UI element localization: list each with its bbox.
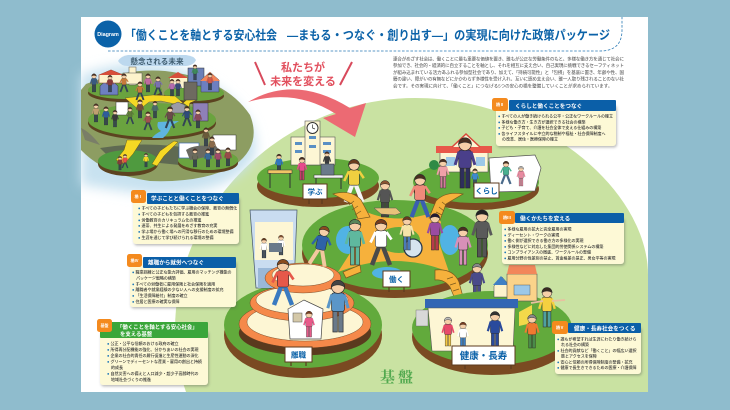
list II: ● すべての人が働き続けられる公平・公正なワークルールの確立 (498, 112, 613, 118)
houses (493, 265, 537, 301)
badge I: 橋Ⅰ (134, 193, 142, 199)
list IV: ● 離職者や就業経験の少ない人への支援制度の拡充 (132, 286, 224, 292)
panel: bridge IV from leaving work to employment (127, 254, 236, 307)
list foundation: ● 所得再分配機能の強化、分かちあいの社会の実現 (107, 346, 199, 352)
intro paragraph: 参加でき、社会的・経済的に自立することを軸とし、それを相互に支え合い、自己実現に挑戦できるセーフティネット (393, 62, 624, 69)
Diagram badge: Diagram (97, 32, 119, 38)
panel: foundation: 「働くことを軸とする安心社会」 (117, 323, 198, 331)
list III: ● 多様性などに対応した集団的労使関係システムの構築 (504, 243, 603, 249)
list foundation: 地域社会づくりの推進 (111, 376, 151, 382)
list I: ● 連帯、共生による発展をめざす教育の充実 (138, 222, 217, 228)
list IV: ● 住居と医療の確実な保障 (132, 298, 180, 304)
list V: 肢とアクセスを保障 (561, 353, 597, 359)
intro paragraph: 連合がめざす社会は、働くことに最も重要な価値を置き、誰もが公正な労働条件のもと、多様な働き方を通じて社会に (393, 56, 624, 62)
panel: bridge I learning and working: 学ぶことと働くことをつなぐ (151, 194, 224, 202)
panel: bridge V health and longevity: 健康・長寿社会をつくる (574, 324, 635, 332)
list III: ● 働く側が選択できる働き方の多様化の実現 (504, 237, 583, 243)
intro paragraph (393, 56, 624, 89)
panel: bridge III changing ways of working: 働くかたちを変える (520, 214, 570, 222)
list V: れる社会の構築 (561, 341, 589, 347)
list V: ● 社会的貢献など「働くこと」の幅広い選択 (557, 347, 637, 353)
list IV: ● すべての労働者に雇用保険と社会保険を適用 (132, 280, 215, 286)
stream (152, 121, 179, 138)
list foundation: ● 企業の社会的責任の履行促進と生産性運動の深化 (107, 352, 199, 358)
cloud label: feared future: 懸念される未来 (130, 56, 184, 66)
list foundation: ● グリーンでディーセントな産業・雇用の創出と持続 (107, 358, 202, 364)
list I: ● すべての子どもを包摂する教育の推進 (138, 210, 209, 216)
panel: bridge III changing ways of working (499, 211, 624, 264)
sign: learn: 学ぶ (308, 186, 323, 196)
students and desks (268, 152, 364, 202)
care building (489, 155, 541, 192)
list V: ● 安心と信頼の所得保障制度の整備・拡充 (557, 358, 633, 364)
orange star path (338, 210, 449, 272)
island: health and longevity (412, 265, 572, 375)
badge IV: 橋Ⅳ (130, 257, 138, 263)
island: living (413, 134, 541, 210)
panel: bridge V health and longevity (552, 321, 641, 374)
intro paragraph: 会です。その実現に向けて、「働くこと」につなげる5つの安心の橋を整備していくことが求められています。 (393, 82, 612, 89)
island: learning (257, 121, 379, 207)
label: foundation: 基盤 (380, 366, 416, 387)
panel: feared future illustration (81, 55, 256, 195)
list II: ● 子ども・子育て、介護を社会全体で支える仕組みの構築 (498, 124, 601, 130)
list I: ● 生涯を通じて学び続けられる環境の整備 (138, 234, 214, 240)
list IV: パッケージ戦略の構築 (136, 274, 176, 280)
sign: leaving work (285, 347, 312, 366)
crowd of worried people (90, 65, 232, 170)
house (436, 134, 492, 172)
white sheet (81, 17, 648, 392)
list I: ● すべての子どもたちに学ぶ機会の保障、教育の無償化 (138, 204, 237, 210)
island: leaving work (224, 210, 382, 378)
heading: we change the future (255, 60, 352, 88)
title text: ―まもる・つなぐ・創り出す―」の実現に向けた政策パッケージ (287, 28, 610, 42)
badge III: 橋Ⅲ (503, 214, 511, 220)
list foundation: ● 自然災害への備えと人口減少・超少子高齢時代の (107, 370, 199, 376)
panel: foundation: を支える基盤 (120, 330, 153, 338)
list III (504, 226, 616, 260)
list I: ● 学ぶ場から働く場への円滑な移行のための環境整備 (138, 228, 234, 234)
sign: leaving work: 離職 (291, 350, 306, 360)
list II: ● 多様な働き方・生き方が選択できる社会の構築 (498, 118, 585, 124)
list I (138, 204, 237, 240)
Diagram badge (94, 20, 122, 48)
family people (429, 138, 479, 188)
list II (498, 112, 613, 142)
list III: ● 雇用分野の性差別の禁止、賃金格差の是正、男女平等の実現 (504, 254, 616, 260)
future islands (88, 84, 162, 102)
panel: bridge II living and working: くらしと働くことをつなぐ (515, 102, 582, 110)
badge II: 橋Ⅱ (496, 101, 504, 107)
list III: ● コンプライアンスの徹底、ワークルールの整備 (504, 249, 591, 255)
panel: foundation (97, 319, 208, 385)
cloud label: feared future (118, 55, 196, 66)
badge V: 橋Ⅴ (556, 324, 564, 330)
office tower (250, 210, 297, 288)
list IV: ● 「生活保障給付」制度の確立 (132, 292, 188, 298)
intro paragraph: 籍の違い、障がいの有無などにかかわらず多様性を受け入れ、互いに認め支え合い、誰一人取り残されることのない社 (393, 76, 624, 83)
island: working (302, 174, 491, 300)
list I: ● 労働教育のカリキュラム化の推進 (138, 216, 201, 222)
school building (291, 121, 335, 165)
heading: we change the future: 私たちが (281, 60, 325, 74)
sign: work (383, 271, 410, 292)
list III: ● 多様な雇用の拡大と完全雇用の実現 (504, 226, 572, 232)
bridge steps (349, 201, 459, 291)
older couple (519, 287, 565, 348)
sign: work: 働く (389, 274, 404, 284)
panel: bridge I learning and working (131, 190, 239, 244)
arrow: we change the future (248, 89, 366, 137)
list V (557, 336, 637, 370)
lakes (336, 226, 360, 254)
heading: we change the future: 未来を変える (270, 74, 336, 88)
list V: ● 誰もが希望すれば生涯にわたり働き続けら (557, 336, 637, 342)
intro paragraph: が組み込まれている活力あふれる参加型社会であり、加えて、「持続可能性」と「包摂」を基底に置き、年齢や性、国 (393, 69, 624, 76)
list foundation: ● 公正・公平な信頼のおける政府の確立 (107, 340, 179, 346)
wheelchair user (400, 217, 422, 257)
walking people (346, 174, 491, 300)
list III: ● ディーセント・ワークの実現 (504, 231, 559, 237)
large light green ground (175, 98, 648, 392)
hall with cheerful people (416, 299, 518, 351)
sign: living: くらし (475, 186, 498, 196)
list foundation (107, 340, 202, 382)
panel: bridge II living and working (492, 98, 616, 146)
sign: health: 健康・長寿 (460, 350, 508, 362)
curved bridges (333, 192, 463, 299)
buildings (100, 78, 118, 95)
people on tiers (272, 224, 348, 332)
list foundation: 的成長 (111, 364, 123, 370)
panel: bridge IV from leaving work to employment: 離職から就労へつなぐ (148, 258, 204, 266)
title header (94, 17, 622, 51)
house with person (288, 300, 323, 339)
list IV: ● 職業訓練と公正な能力評価、雇用のマッチング機能の (132, 268, 232, 274)
stepped tiers (239, 263, 371, 355)
list V: ● 健康で長生きできるための医療・介護保障 (557, 364, 636, 370)
title text: 「働くことを軸とする安心社会 (125, 28, 278, 42)
badge foundation: 基盤 (100, 322, 108, 328)
list II: の改革、居住・医療保障の確立 (502, 136, 558, 142)
yellow paths (125, 95, 183, 110)
list IV (132, 268, 232, 304)
sign: health (452, 346, 515, 369)
list II: ● 各ライフスタイルに中立的な税制や福祉・社会保障制度へ (498, 130, 606, 136)
dark grid ground (100, 144, 200, 165)
